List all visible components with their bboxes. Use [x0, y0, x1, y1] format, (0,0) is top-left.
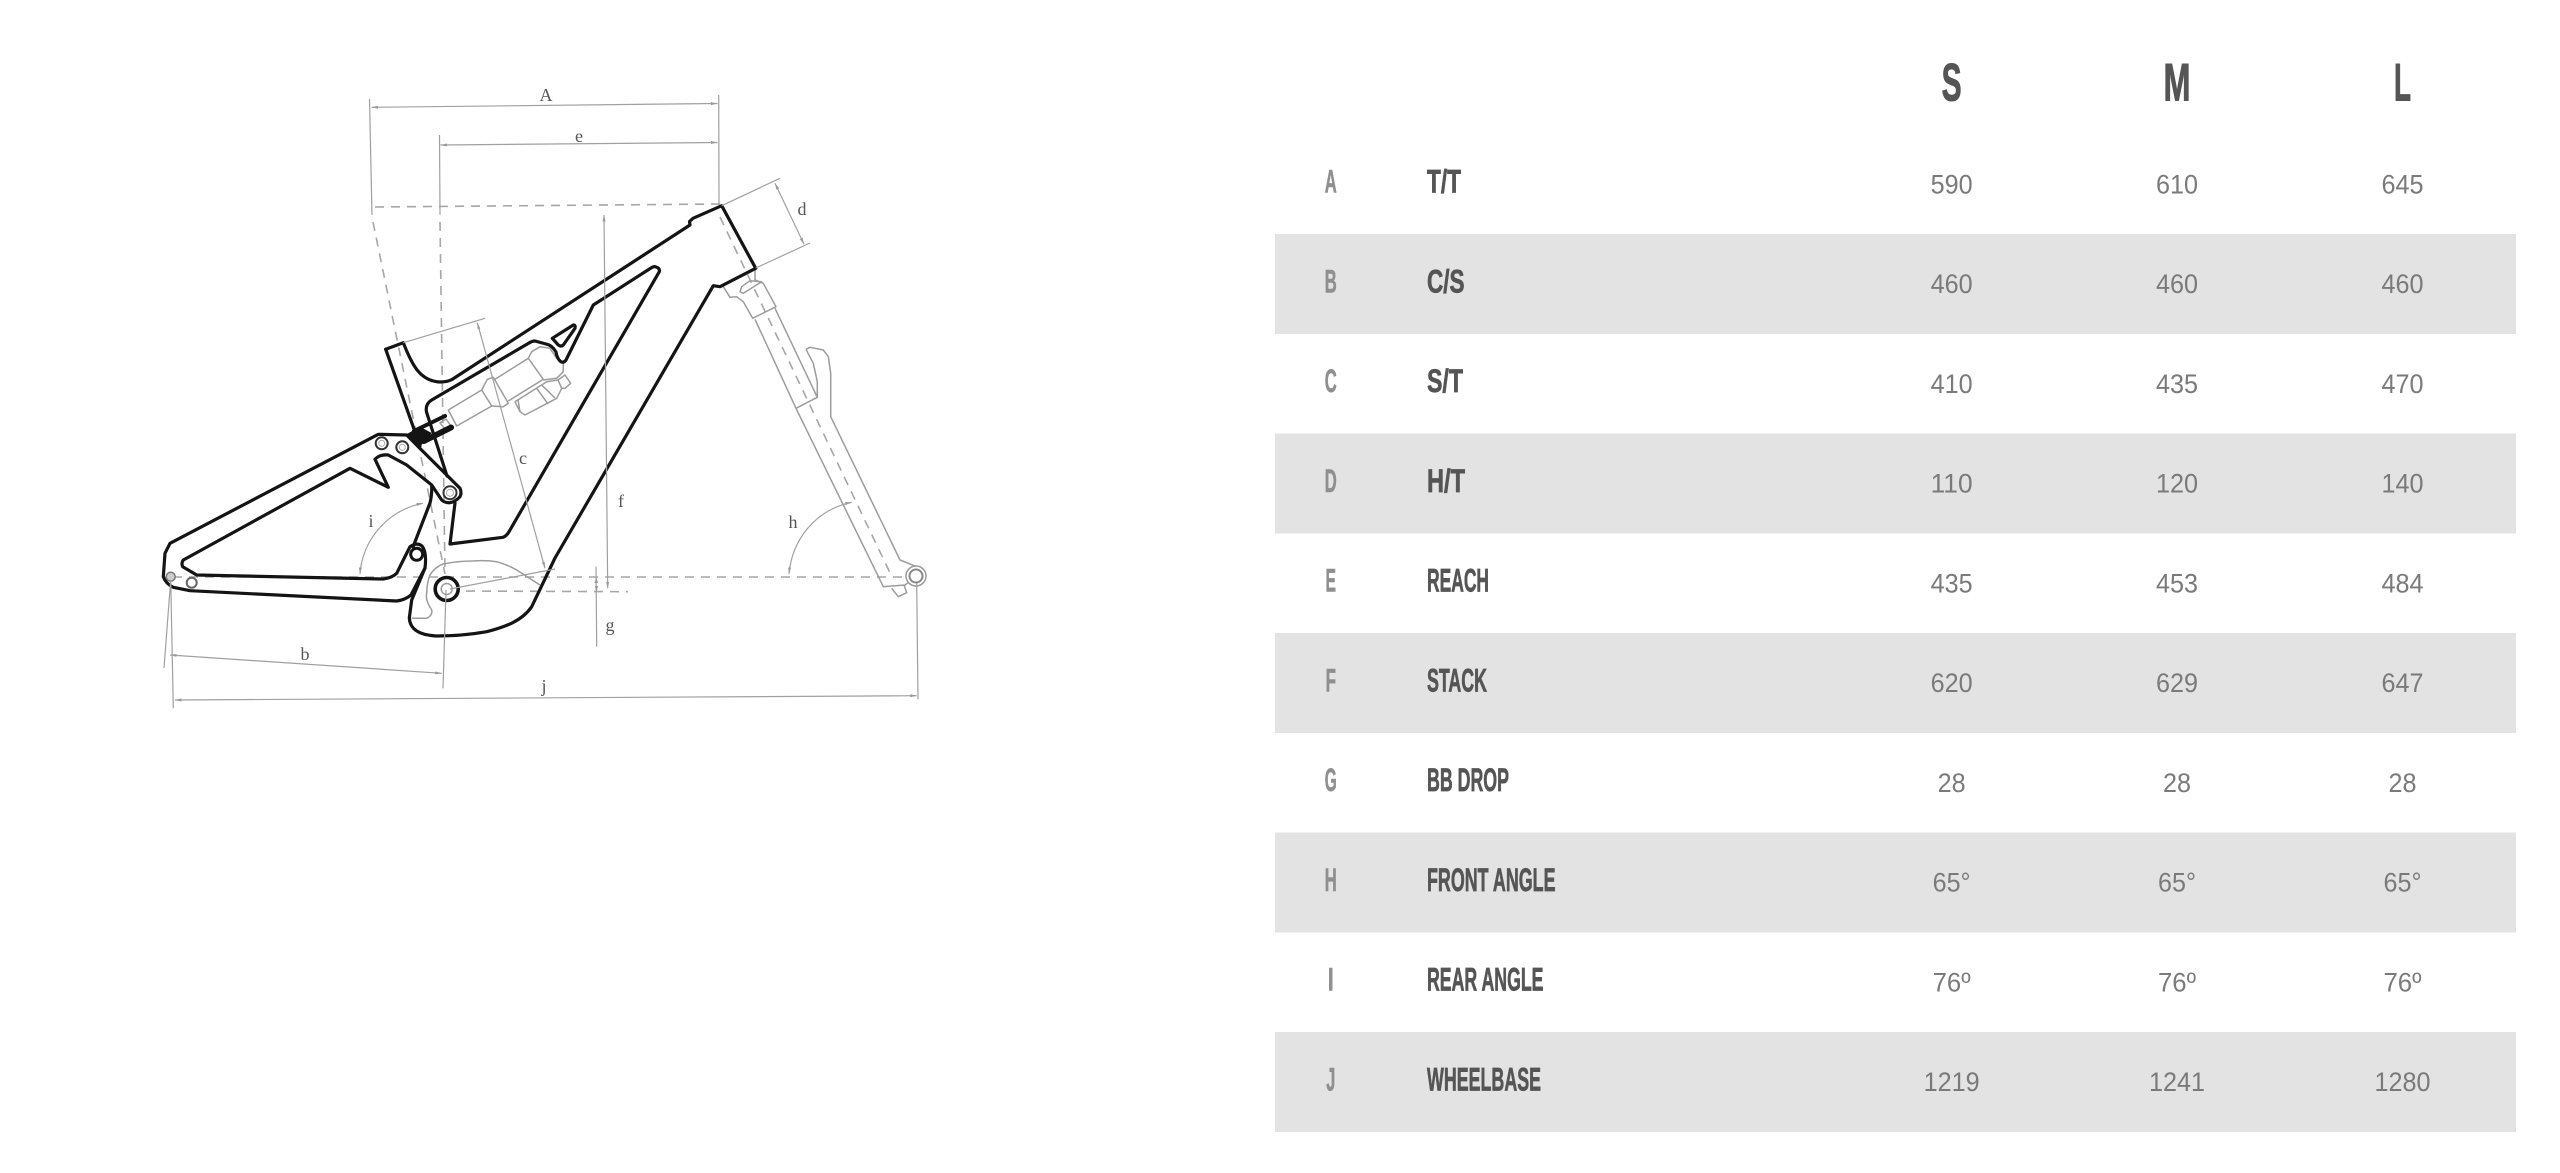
row I: REAR ANGLE: [1427, 962, 1544, 998]
row C: 410: [1931, 369, 1973, 399]
bottom bracket: [435, 578, 458, 600]
dimension g: bb drop: [594, 567, 614, 647]
row C: C: [1325, 363, 1337, 399]
row G: BB DROP: [1427, 762, 1509, 798]
row D: 120: [2156, 469, 2198, 499]
row C: [1325, 363, 2424, 399]
row B: 460: [2382, 269, 2424, 299]
row B: B: [1325, 264, 1337, 300]
row I: I: [1328, 962, 1334, 998]
row G: G: [1325, 762, 1337, 798]
row H: 65°: [1933, 868, 1971, 898]
row A: 610: [2156, 170, 2198, 200]
bottom bracket inner contour: [412, 561, 540, 618]
row H: 65°: [2384, 868, 2422, 898]
row J: WHEELBASE: [1427, 1061, 1541, 1097]
row J: 1219: [1924, 1067, 1980, 1097]
dimension e: reach: e: [575, 126, 583, 146]
row A: 645: [2382, 170, 2424, 200]
dimension A: top tube: [370, 85, 719, 215]
row G: 28: [2163, 768, 2191, 798]
row C: 435: [2156, 369, 2198, 399]
row C: S/T: [1427, 363, 1463, 399]
dimension h: front angle: [788, 502, 852, 574]
dimension b: chain stay: [164, 580, 446, 688]
pivot bearings: [166, 437, 456, 588]
row D: [1275, 434, 2516, 534]
dimension j: wheelbase: [171, 580, 918, 708]
panel: frame geometry diagram: [163, 85, 926, 708]
table header: sizes: L: [2394, 54, 2411, 113]
row A: T/T: [1427, 164, 1461, 200]
row G: [1325, 762, 2416, 798]
row F: 629: [2156, 668, 2198, 698]
panel: geometry table: [1275, 54, 2516, 1132]
dimension c: seat tube: [403, 318, 555, 589]
row F: STACK: [1427, 662, 1487, 698]
dimension g: bb drop: g: [606, 615, 614, 635]
dimension i: rear angle: [360, 503, 423, 574]
dimension j: wheelbase: j: [540, 676, 547, 696]
row J: [1275, 1032, 2516, 1132]
dimension A: top tube: A: [540, 85, 552, 105]
row F: [1275, 633, 2516, 733]
table header: sizes: [1942, 54, 2411, 113]
dimension d: head tube: d: [798, 199, 806, 219]
row B: 460: [1931, 269, 1973, 299]
shock mount clevis: [405, 416, 451, 447]
row A: A: [1325, 164, 1337, 200]
row F: 620: [1931, 668, 1973, 698]
row F: F: [1325, 662, 1336, 698]
dimension b: chain stay: b: [300, 644, 310, 664]
dimension i: rear angle: i: [368, 511, 374, 531]
dimension f: stack: f: [618, 491, 624, 511]
row E: REACH: [1427, 563, 1489, 599]
row D: D: [1325, 463, 1337, 499]
row E: 453: [2156, 568, 2198, 598]
row B: C/S: [1427, 264, 1464, 300]
row B: 460: [2156, 269, 2198, 299]
table header: sizes: S: [1942, 54, 1962, 113]
fork dropout axle: [906, 566, 926, 586]
row A: 590: [1931, 170, 1973, 200]
front triangle frame: [386, 206, 756, 636]
row H: [1275, 832, 2516, 932]
row H: 65°: [2158, 868, 2196, 898]
fork outline: [723, 270, 917, 597]
row A: [1325, 164, 2424, 200]
row I: 76º: [1933, 967, 1971, 997]
row F: 647: [2382, 668, 2424, 698]
row E: E: [1325, 563, 1336, 599]
row J: 1241: [2149, 1067, 2205, 1097]
rear swingarm: [163, 434, 461, 601]
table header: sizes: M: [2164, 54, 2190, 113]
row I: 76º: [2384, 967, 2422, 997]
row D: 140: [2382, 469, 2424, 499]
dimension f: stack: [604, 215, 624, 588]
row D: 110: [1931, 469, 1973, 499]
row I: 76º: [2158, 967, 2196, 997]
dimension h: front angle: h: [788, 512, 798, 532]
row E: 435: [1931, 568, 1973, 598]
dimension c: seat tube: c: [519, 448, 527, 468]
rear shock: [440, 347, 571, 429]
row G: 28: [1938, 768, 1966, 798]
row G: 28: [2388, 768, 2416, 798]
row B: [1275, 234, 2516, 334]
dashed construction lines: [173, 204, 916, 592]
row J: 1280: [2374, 1067, 2430, 1097]
row C: 470: [2382, 369, 2424, 399]
row H: FRONT ANGLE: [1427, 862, 1556, 898]
row J: J: [1326, 1061, 1335, 1097]
row E: [1325, 563, 2424, 599]
dimension d: head tube: [722, 178, 810, 268]
row D: H/T: [1427, 463, 1465, 499]
row E: 484: [2382, 568, 2424, 598]
row I: [1328, 962, 2422, 998]
row H: H: [1325, 862, 1337, 898]
